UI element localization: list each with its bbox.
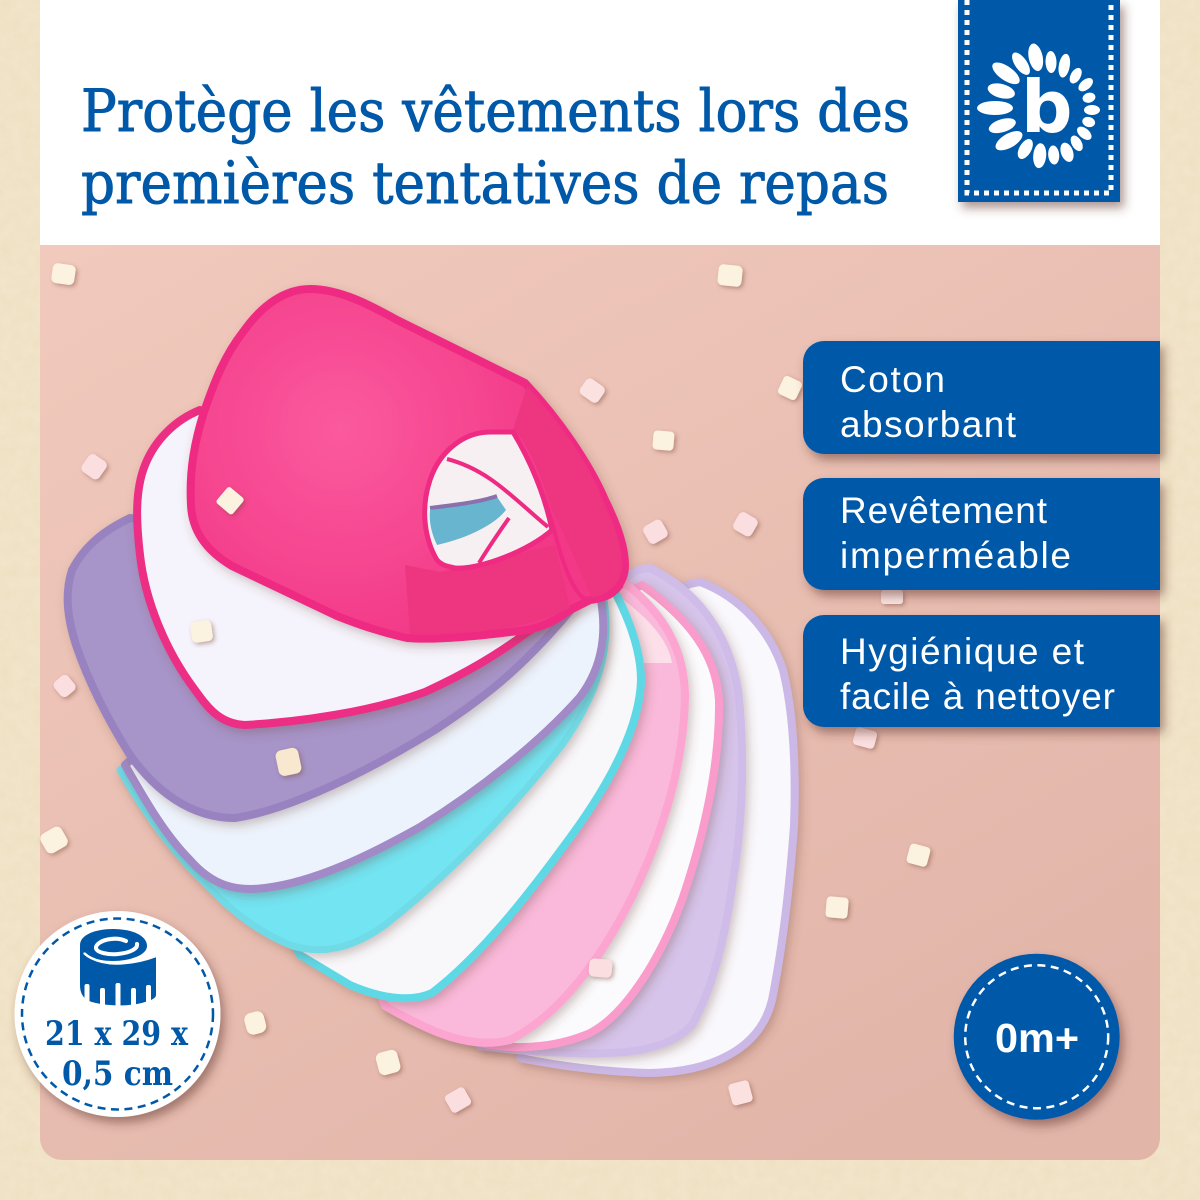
feature label: Coton absorbant: Coton	[840, 359, 945, 400]
feature label: Hygiénique et facile à nettoyer: facile à nettoyer	[840, 676, 1115, 717]
badge: dimensions	[14, 911, 220, 1117]
panel: white header	[40, 0, 1160, 245]
feature label: Revêtement imperméable: imperméable	[840, 535, 1071, 576]
bib: purple terry	[68, 518, 575, 818]
bib: white with hot pink border	[137, 410, 550, 725]
badge: age 0m+: 0m+	[995, 1015, 1079, 1061]
logo tag	[958, 0, 1120, 202]
logo flower petals	[977, 42, 1100, 169]
pale patch on bib neck	[610, 597, 672, 663]
title	[81, 77, 910, 217]
badge: age 0m+	[954, 954, 1120, 1120]
neck opening	[425, 432, 552, 568]
logo letter: b	[1021, 65, 1073, 149]
feature label: Revêtement imperméable: Revêtement	[840, 490, 1048, 531]
feature label: Revêtement imperméable	[803, 478, 1160, 590]
bib: white with purple border	[125, 595, 603, 889]
under-layers seen through opening	[430, 497, 506, 545]
panel: photo background	[40, 245, 1160, 1160]
bib: white with lilac border	[520, 582, 795, 1073]
neck tab	[513, 432, 622, 600]
feature label: Coton absorbant	[803, 341, 1160, 454]
feature label: Hygiénique et facile à nettoyer: Hygiénique et	[840, 631, 1085, 672]
title: Protège les vêtements lors des	[81, 77, 910, 145]
dimensions text: 21 x 29 x	[45, 1014, 189, 1054]
title: premières tentatives de repas	[81, 149, 889, 217]
bib: white with cyan border	[220, 592, 641, 998]
bib: lilac terry	[480, 568, 742, 1053]
bib: white with pink border	[385, 585, 719, 1047]
icon: measuring tape roll	[80, 929, 156, 1009]
feature label: Hygiénique et facile à nettoyer	[803, 615, 1160, 727]
bib: pink terry	[300, 584, 685, 1043]
bib: cyan terry	[120, 600, 606, 950]
marshmallows	[38, 263, 931, 1114]
darker terry neck band	[513, 386, 622, 598]
dimensions text: 0,5 cm	[62, 1054, 173, 1094]
feature label: Coton absorbant: absorbant	[840, 404, 1017, 445]
bib: top hot pink terry with neck opening	[191, 289, 625, 639]
dimensions text	[45, 1014, 189, 1094]
